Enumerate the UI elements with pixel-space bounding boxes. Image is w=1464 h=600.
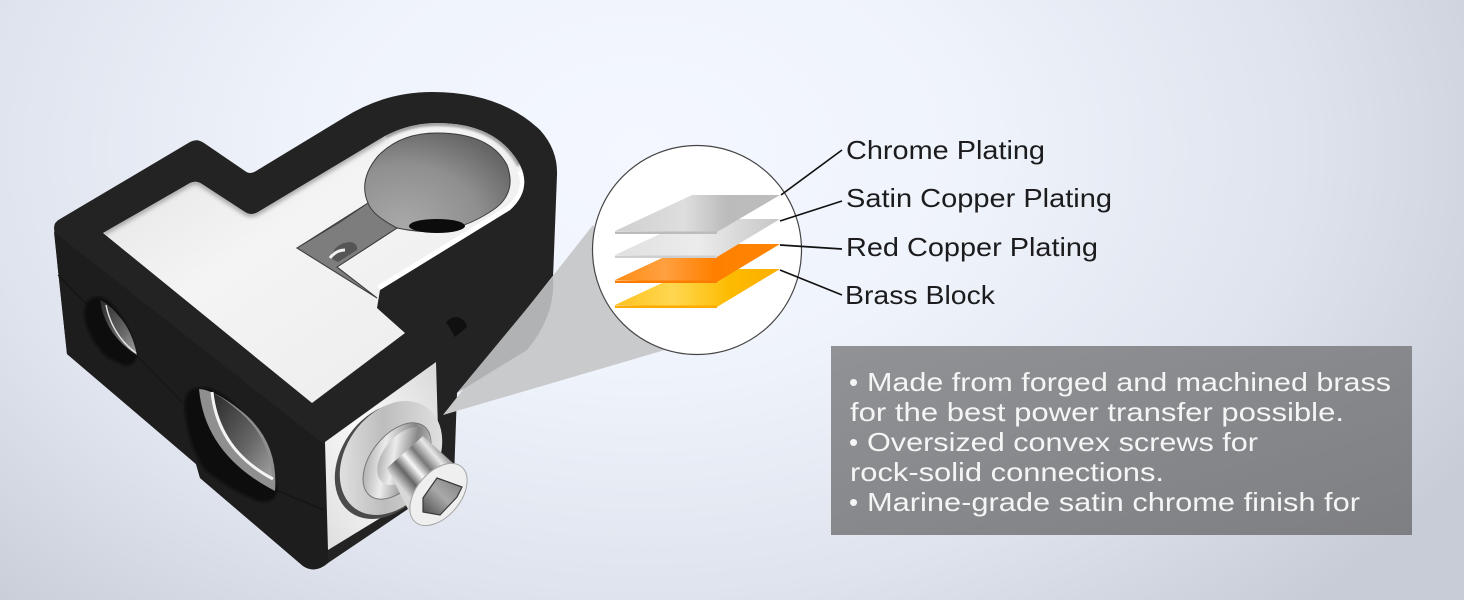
layer: satin copper plating (615, 219, 780, 258)
boot side shading (54, 232, 328, 569)
icon: small side port (84, 297, 137, 366)
leader lines (780, 150, 842, 295)
feature list text: • (849, 487, 858, 517)
icon: large side port (185, 388, 277, 502)
screw head (399, 453, 478, 536)
feature list text: Oversized convex screws for (867, 427, 1258, 457)
feature list text: Made from forged and machined brass (867, 367, 1391, 397)
silver top face (103, 123, 525, 403)
washer (319, 381, 463, 535)
layer labels: Satin Copper Plating (846, 183, 1112, 213)
slot screw hole (297, 203, 397, 298)
shadow cone linking screw to magnified circle (443, 225, 665, 415)
hex socket (423, 478, 462, 515)
inner collar (367, 417, 441, 495)
layer labels: Brass Block (845, 280, 996, 310)
magnified circle with plating layers (592, 146, 802, 354)
washer back edge (313, 383, 461, 539)
shank (387, 436, 464, 517)
connector body: black rubber boot (54, 92, 557, 569)
boot seam (58, 275, 325, 510)
layer: chrome plating (615, 195, 780, 234)
bore opening (409, 219, 465, 233)
feature list text: • (849, 367, 858, 397)
feature list text: Marine-grade satin chrome finish for (867, 487, 1360, 517)
layer: brass block (615, 269, 780, 308)
layer labels: Red Copper Plating (846, 232, 1098, 262)
keyhole slot (297, 133, 510, 298)
feature list text: for the best power transfer possible. (850, 397, 1344, 427)
feature list text: • (849, 427, 858, 457)
feature list text (849, 367, 1391, 517)
bolt assembly (313, 381, 478, 539)
layer labels: Chrome Plating (846, 135, 1045, 165)
feature list text: rock-solid connections. (850, 457, 1164, 487)
feature callout panel (831, 346, 1412, 535)
icon: rear notch (446, 317, 467, 337)
front silver plate (325, 362, 438, 550)
layer: red copper plating (615, 244, 780, 283)
layer labels (845, 135, 1112, 310)
lock ring (349, 410, 445, 512)
